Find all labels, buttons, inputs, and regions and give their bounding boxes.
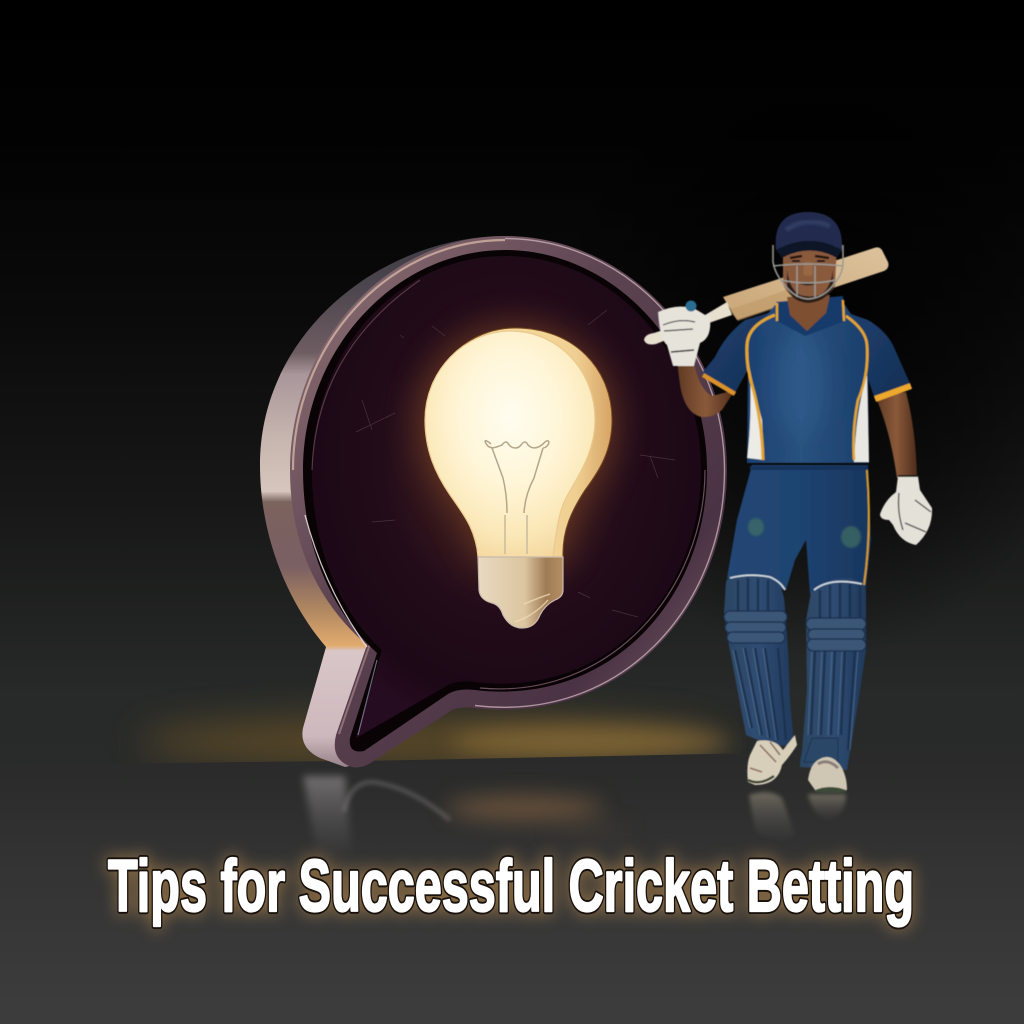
bulb filament: [485, 441, 549, 554]
bulb glass: [425, 331, 595, 557]
shirt sleeves: [702, 310, 778, 393]
scratches: [356, 310, 675, 617]
cricket player: [644, 212, 932, 794]
top batting glove: [658, 300, 710, 366]
collar and neck: [776, 296, 845, 336]
left batting pad: [724, 575, 794, 746]
left shoe: [747, 735, 797, 785]
floor: [0, 753, 1024, 1024]
raised left arm: [677, 362, 735, 417]
shirt torso: [746, 305, 869, 463]
white side panels: [747, 370, 764, 460]
player head: [773, 212, 843, 303]
right arm: [876, 392, 917, 478]
helmet grille: [773, 245, 843, 299]
right batting pad: [800, 578, 866, 770]
bulb screw base: [478, 557, 563, 628]
gold piping: [703, 315, 911, 460]
bubble reflection: [303, 776, 630, 860]
helmet: [776, 212, 842, 250]
bubble dark face: [303, 250, 707, 751]
speech bubble with light bulb: [260, 236, 727, 767]
bat: [644, 247, 888, 344]
bubble front rim: [290, 236, 727, 767]
lower hand glove: [880, 476, 932, 545]
dark backdrop behind player: [550, 0, 1024, 660]
bulb halo: [420, 325, 616, 562]
player reflection: [749, 792, 846, 839]
trousers: [727, 465, 871, 594]
right shoe: [808, 757, 847, 794]
golden floor glow: [140, 716, 730, 768]
bubble extruded side: [260, 236, 505, 767]
bulb back shell: [430, 328, 612, 557]
